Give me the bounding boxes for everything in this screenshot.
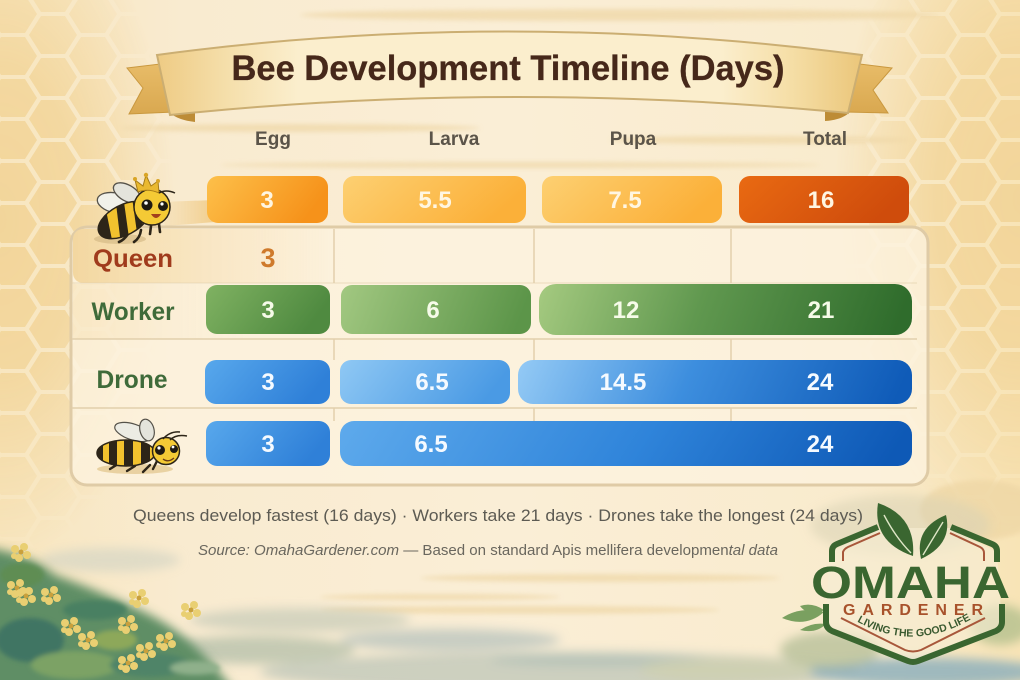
logo leaf right bbox=[920, 515, 947, 559]
ribbon left fold bbox=[170, 110, 195, 122]
row label: queen: Queen bbox=[93, 245, 173, 273]
ribbon left tail bbox=[127, 64, 174, 114]
logo hexagon frame bbox=[826, 527, 1002, 662]
queen bars: 16 bbox=[808, 187, 834, 214]
logo tagline: LIVING THE GOOD LIFE bbox=[858, 613, 970, 637]
logo leaf veins bbox=[884, 515, 943, 555]
icon: queen bee bbox=[92, 173, 175, 246]
lower drone bars bbox=[206, 421, 912, 466]
title: Bee Development Timeline (Days) bbox=[232, 49, 784, 88]
drone bars: 3 bbox=[261, 369, 275, 396]
drone bars: 24 bbox=[807, 369, 834, 396]
logo word: GARDENER: GARDENER bbox=[843, 602, 983, 619]
row label: drone: Drone bbox=[96, 366, 168, 394]
title ribbon bbox=[127, 32, 892, 122]
logo hexagon backing bbox=[825, 528, 1002, 664]
column headers bbox=[255, 129, 847, 150]
worker bars: 3 bbox=[261, 297, 275, 324]
logo word: OMAHA: OMAHA bbox=[811, 557, 1010, 608]
column headers: Total bbox=[803, 129, 847, 150]
queen bars: 7.5 bbox=[608, 187, 642, 214]
queen bars: 3 bbox=[260, 187, 274, 214]
column headers: Larva bbox=[429, 129, 480, 150]
queen egg value: 3 bbox=[260, 243, 276, 273]
lower drone bars: 6.5 bbox=[414, 431, 448, 458]
drone bars: 6.5 bbox=[415, 369, 449, 396]
table panel bbox=[71, 227, 928, 485]
lower drone bars: 3 bbox=[261, 431, 275, 458]
column headers: Pupa bbox=[610, 129, 657, 150]
logo leaf left bbox=[877, 503, 913, 556]
queen row band bbox=[73, 229, 335, 283]
queen bars: 5.5 bbox=[418, 187, 452, 214]
worker bars: 6 bbox=[426, 297, 440, 324]
queen bars bbox=[207, 176, 909, 223]
queen beam behind first bar bbox=[160, 200, 215, 226]
logo: Omaha Gardener bbox=[782, 503, 1010, 665]
worker row band bbox=[73, 284, 253, 339]
logo side leaves bbox=[782, 605, 826, 631]
drone bars: 14.5 bbox=[600, 369, 646, 396]
ribbon band bbox=[157, 32, 862, 115]
yellow flowers bbox=[7, 543, 201, 673]
summary text: Queens develop fastest (16 days) · Workers take 21 days · Drones take the longest (24 days) bbox=[133, 506, 863, 525]
row label: worker: Worker bbox=[92, 298, 175, 326]
bottom watercolor landscape bbox=[0, 495, 1020, 680]
worker bars: 21 bbox=[808, 297, 834, 324]
ribbon right tail bbox=[846, 64, 892, 113]
column headers: Egg bbox=[255, 129, 291, 150]
flower mound bbox=[0, 545, 240, 680]
source line: Source: OmahaGardener.com — Based on standard Apis mellifera developmental data bbox=[198, 542, 778, 559]
ribbon right fold bbox=[825, 109, 850, 121]
worker bars: 12 bbox=[613, 297, 639, 324]
drone bars bbox=[205, 360, 912, 404]
icon: worker bee bbox=[96, 418, 187, 474]
logo inner red lines bbox=[841, 533, 985, 652]
misty blotches bbox=[40, 495, 1020, 680]
worker bars bbox=[206, 284, 912, 335]
lower drone bars: 24 bbox=[807, 431, 834, 458]
